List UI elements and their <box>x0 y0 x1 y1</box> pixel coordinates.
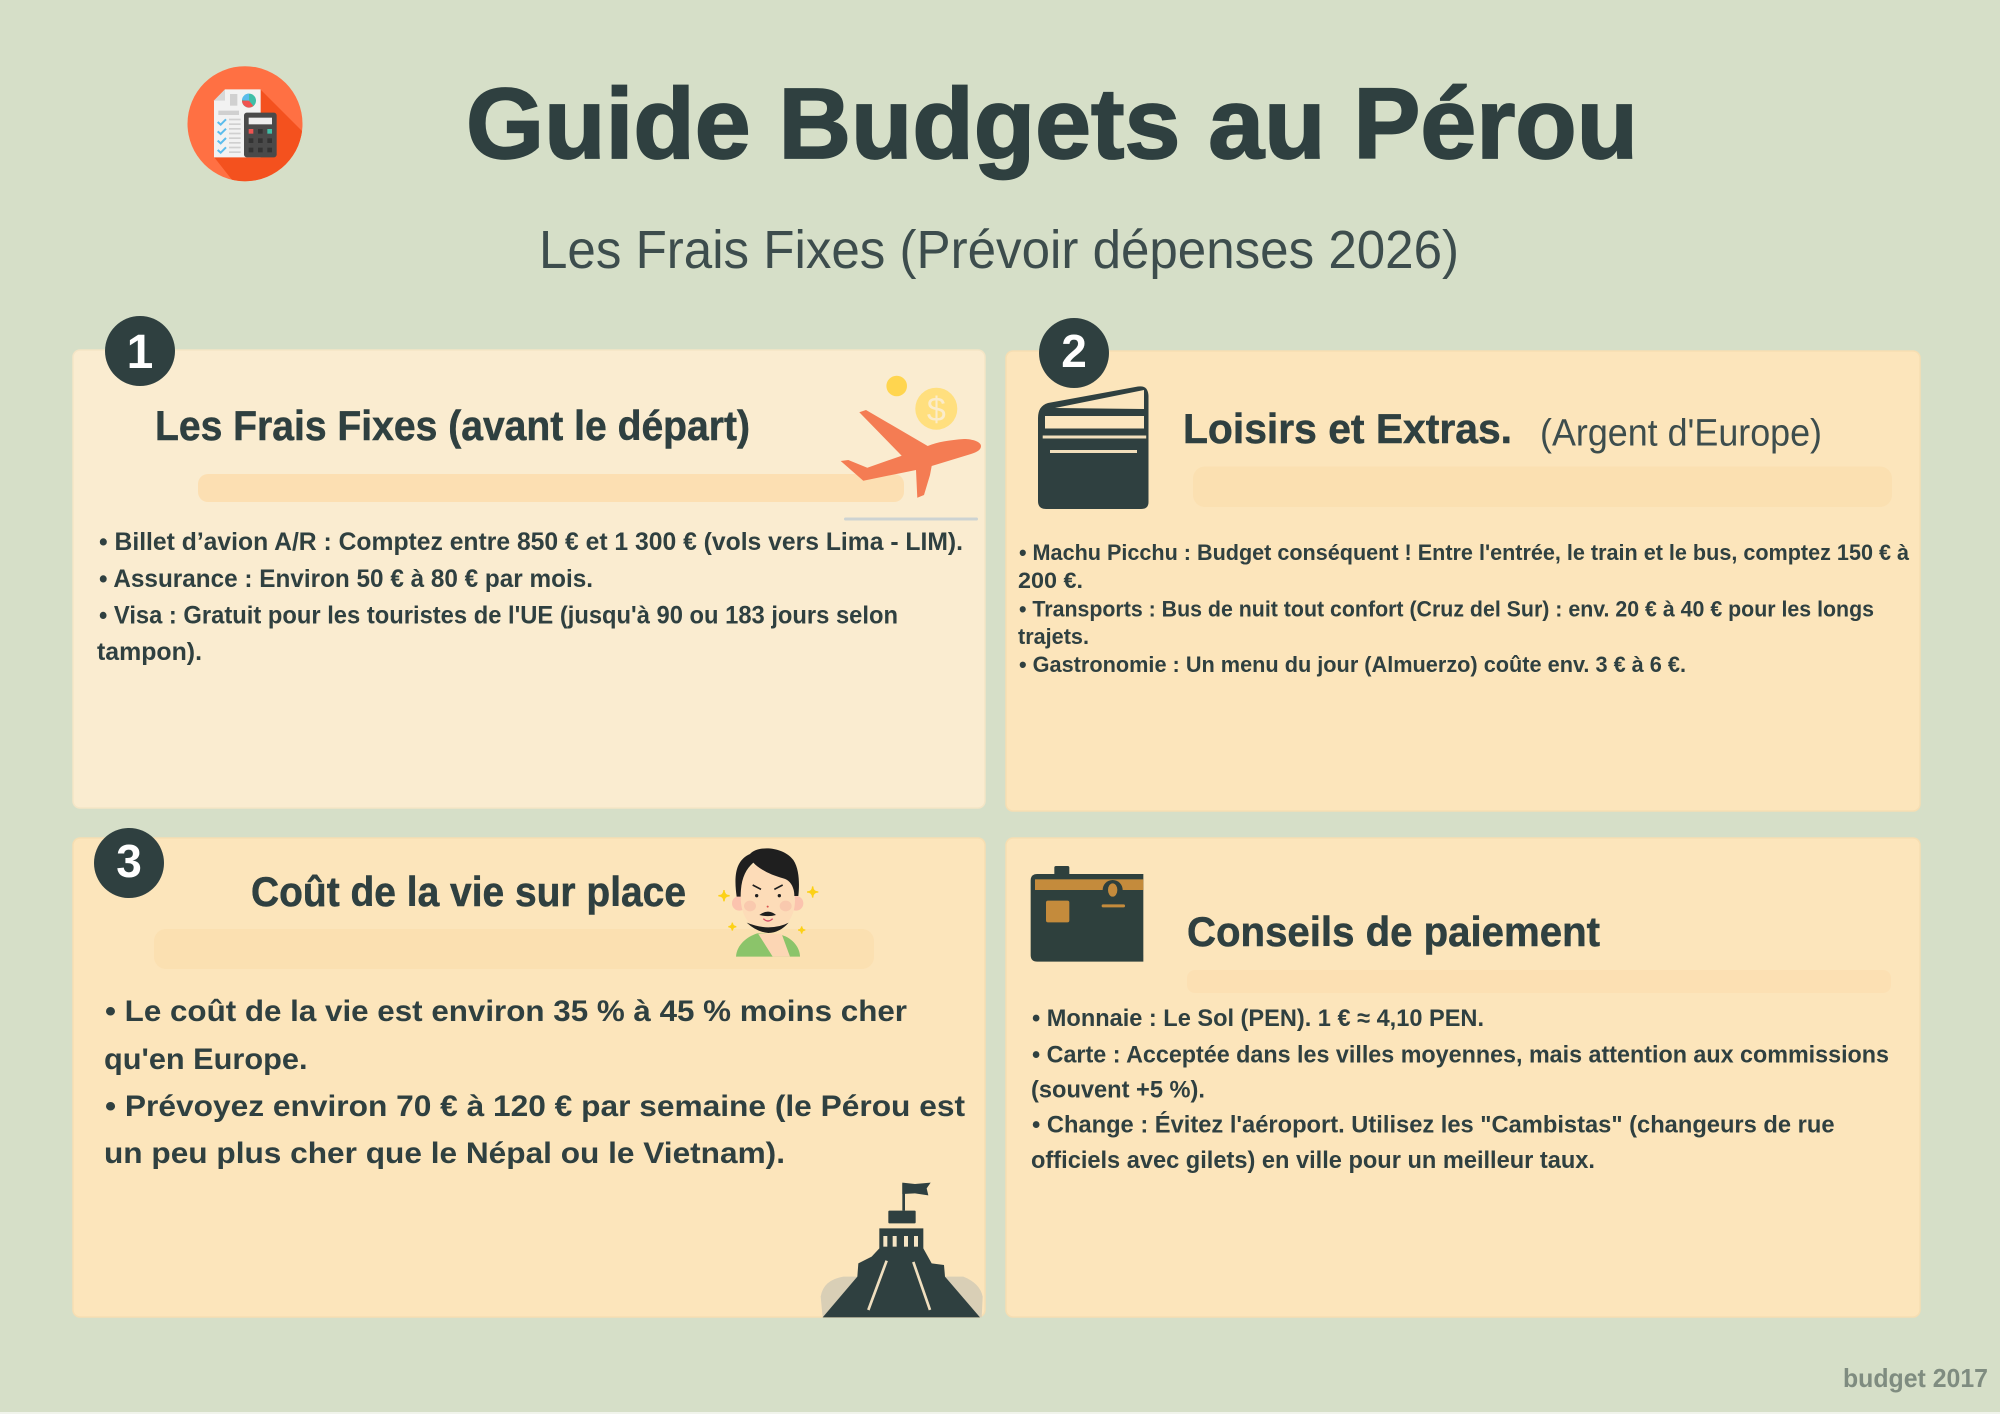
icon: camera card <box>1031 866 1143 962</box>
highlight bar <box>1193 466 1892 507</box>
highlight bar <box>198 474 904 502</box>
text: loisirs list: • Gastronomie : Un menu du jour (Almuerzo) coûte env. 3 € à 6 €. <box>1019 652 1686 677</box>
heading: les frais fixes: Les Frais Fixes (avant le départ) <box>155 402 750 449</box>
text: frais fixes list <box>97 528 963 666</box>
text: conseils list: • Change : Évitez l'aéroport. Utilisez les "Cambistas" (changeurs de rue <box>1032 1110 1834 1138</box>
panel: les frais fixes <box>73 350 985 808</box>
badge 3: 3 <box>116 835 142 887</box>
badge 3 <box>94 828 164 898</box>
text: loisirs list: • Machu Picchu : Budget conséquent ! Entre l'entrée, le train et le bus, comptez 150 € à <box>1019 540 1910 565</box>
text: coût de la vie list: • Le coût de la vie est environ 35 % à 45 % moins cher <box>105 995 907 1028</box>
heading: loisirs et extras: Loisirs et Extras. <box>1183 405 1512 452</box>
text: conseils list: officiels avec gilets) en ville pour un meilleur taux. <box>1031 1147 1595 1174</box>
text: conseils list: • Carte : Acceptée dans les villes moyennes, mais attention aux commissions <box>1032 1042 1889 1068</box>
text: frais fixes list: tampon). <box>97 638 202 666</box>
badge 2 <box>1039 318 1109 388</box>
badge 1 <box>105 316 175 386</box>
text: coût de la vie list: un peu plus cher que le Népal ou le Vietnam). <box>104 1137 785 1170</box>
subtitle: Les Frais Fixes (Prévoir dépenses 2026) <box>539 220 1459 280</box>
text: coût de la vie list <box>104 995 965 1170</box>
subheading: argent d'europe: (Argent d'Europe) <box>1540 412 1822 454</box>
panel: conseils de paiement <box>1006 838 1920 1317</box>
text: coût de la vie list: • Prévoyez environ 70 € à 120 € par semaine (le Pérou est <box>105 1090 965 1123</box>
text: frais fixes list: • Visa : Gratuit pour les touristes de l'UE (jusqu'à 90 ou 183 jours selon <box>99 602 898 630</box>
title: Guide Budgets au Pérou <box>466 68 1638 180</box>
text: frais fixes list: • Billet d’avion A/R : Comptez entre 850 € et 1 300 € (vols vers Lima - LIM). <box>99 528 963 556</box>
highlight bar <box>1187 970 1891 993</box>
text: loisirs list: trajets. <box>1018 624 1089 649</box>
text: conseils list: (souvent +5 %). <box>1031 1076 1205 1104</box>
icon: machu picchu pyramid <box>821 1183 983 1317</box>
text: frais fixes list: • Assurance : Environ 50 € à 80 € par mois. <box>99 565 593 593</box>
highlight bar <box>154 929 874 969</box>
heading: coût de la vie: Coût de la vie sur place <box>251 868 686 915</box>
text: conseils list: • Monnaie : Le Sol (PEN). 1 € ≈ 4,10 PEN. <box>1032 1005 1484 1032</box>
icon: plane and coins <box>841 376 981 520</box>
text: loisirs list <box>1018 540 1910 677</box>
footer label: budget 2017 <box>1843 1363 1988 1393</box>
badge 1: 1 <box>127 326 153 379</box>
text: conseils list <box>1031 1005 1889 1174</box>
text: loisirs list: • Transports : Bus de nuit tout confort (Cruz del Sur) : env. 20 € à 40 € pour les longs <box>1019 596 1874 622</box>
icon: man with sparkles <box>718 848 818 957</box>
text: loisirs list: 200 €. <box>1018 568 1083 593</box>
badge 2: 2 <box>1061 325 1087 377</box>
icon: plane and coins: $ <box>927 391 946 429</box>
heading: conseils de paiement: Conseils de paiement <box>1187 908 1600 955</box>
panel: coût de la vie <box>73 838 985 1317</box>
icon: budget document and calculator <box>188 66 302 182</box>
icon: wallet <box>1038 386 1148 509</box>
panel: loisirs et extras <box>1006 351 1920 811</box>
text: coût de la vie list: qu'en Europe. <box>104 1043 308 1076</box>
